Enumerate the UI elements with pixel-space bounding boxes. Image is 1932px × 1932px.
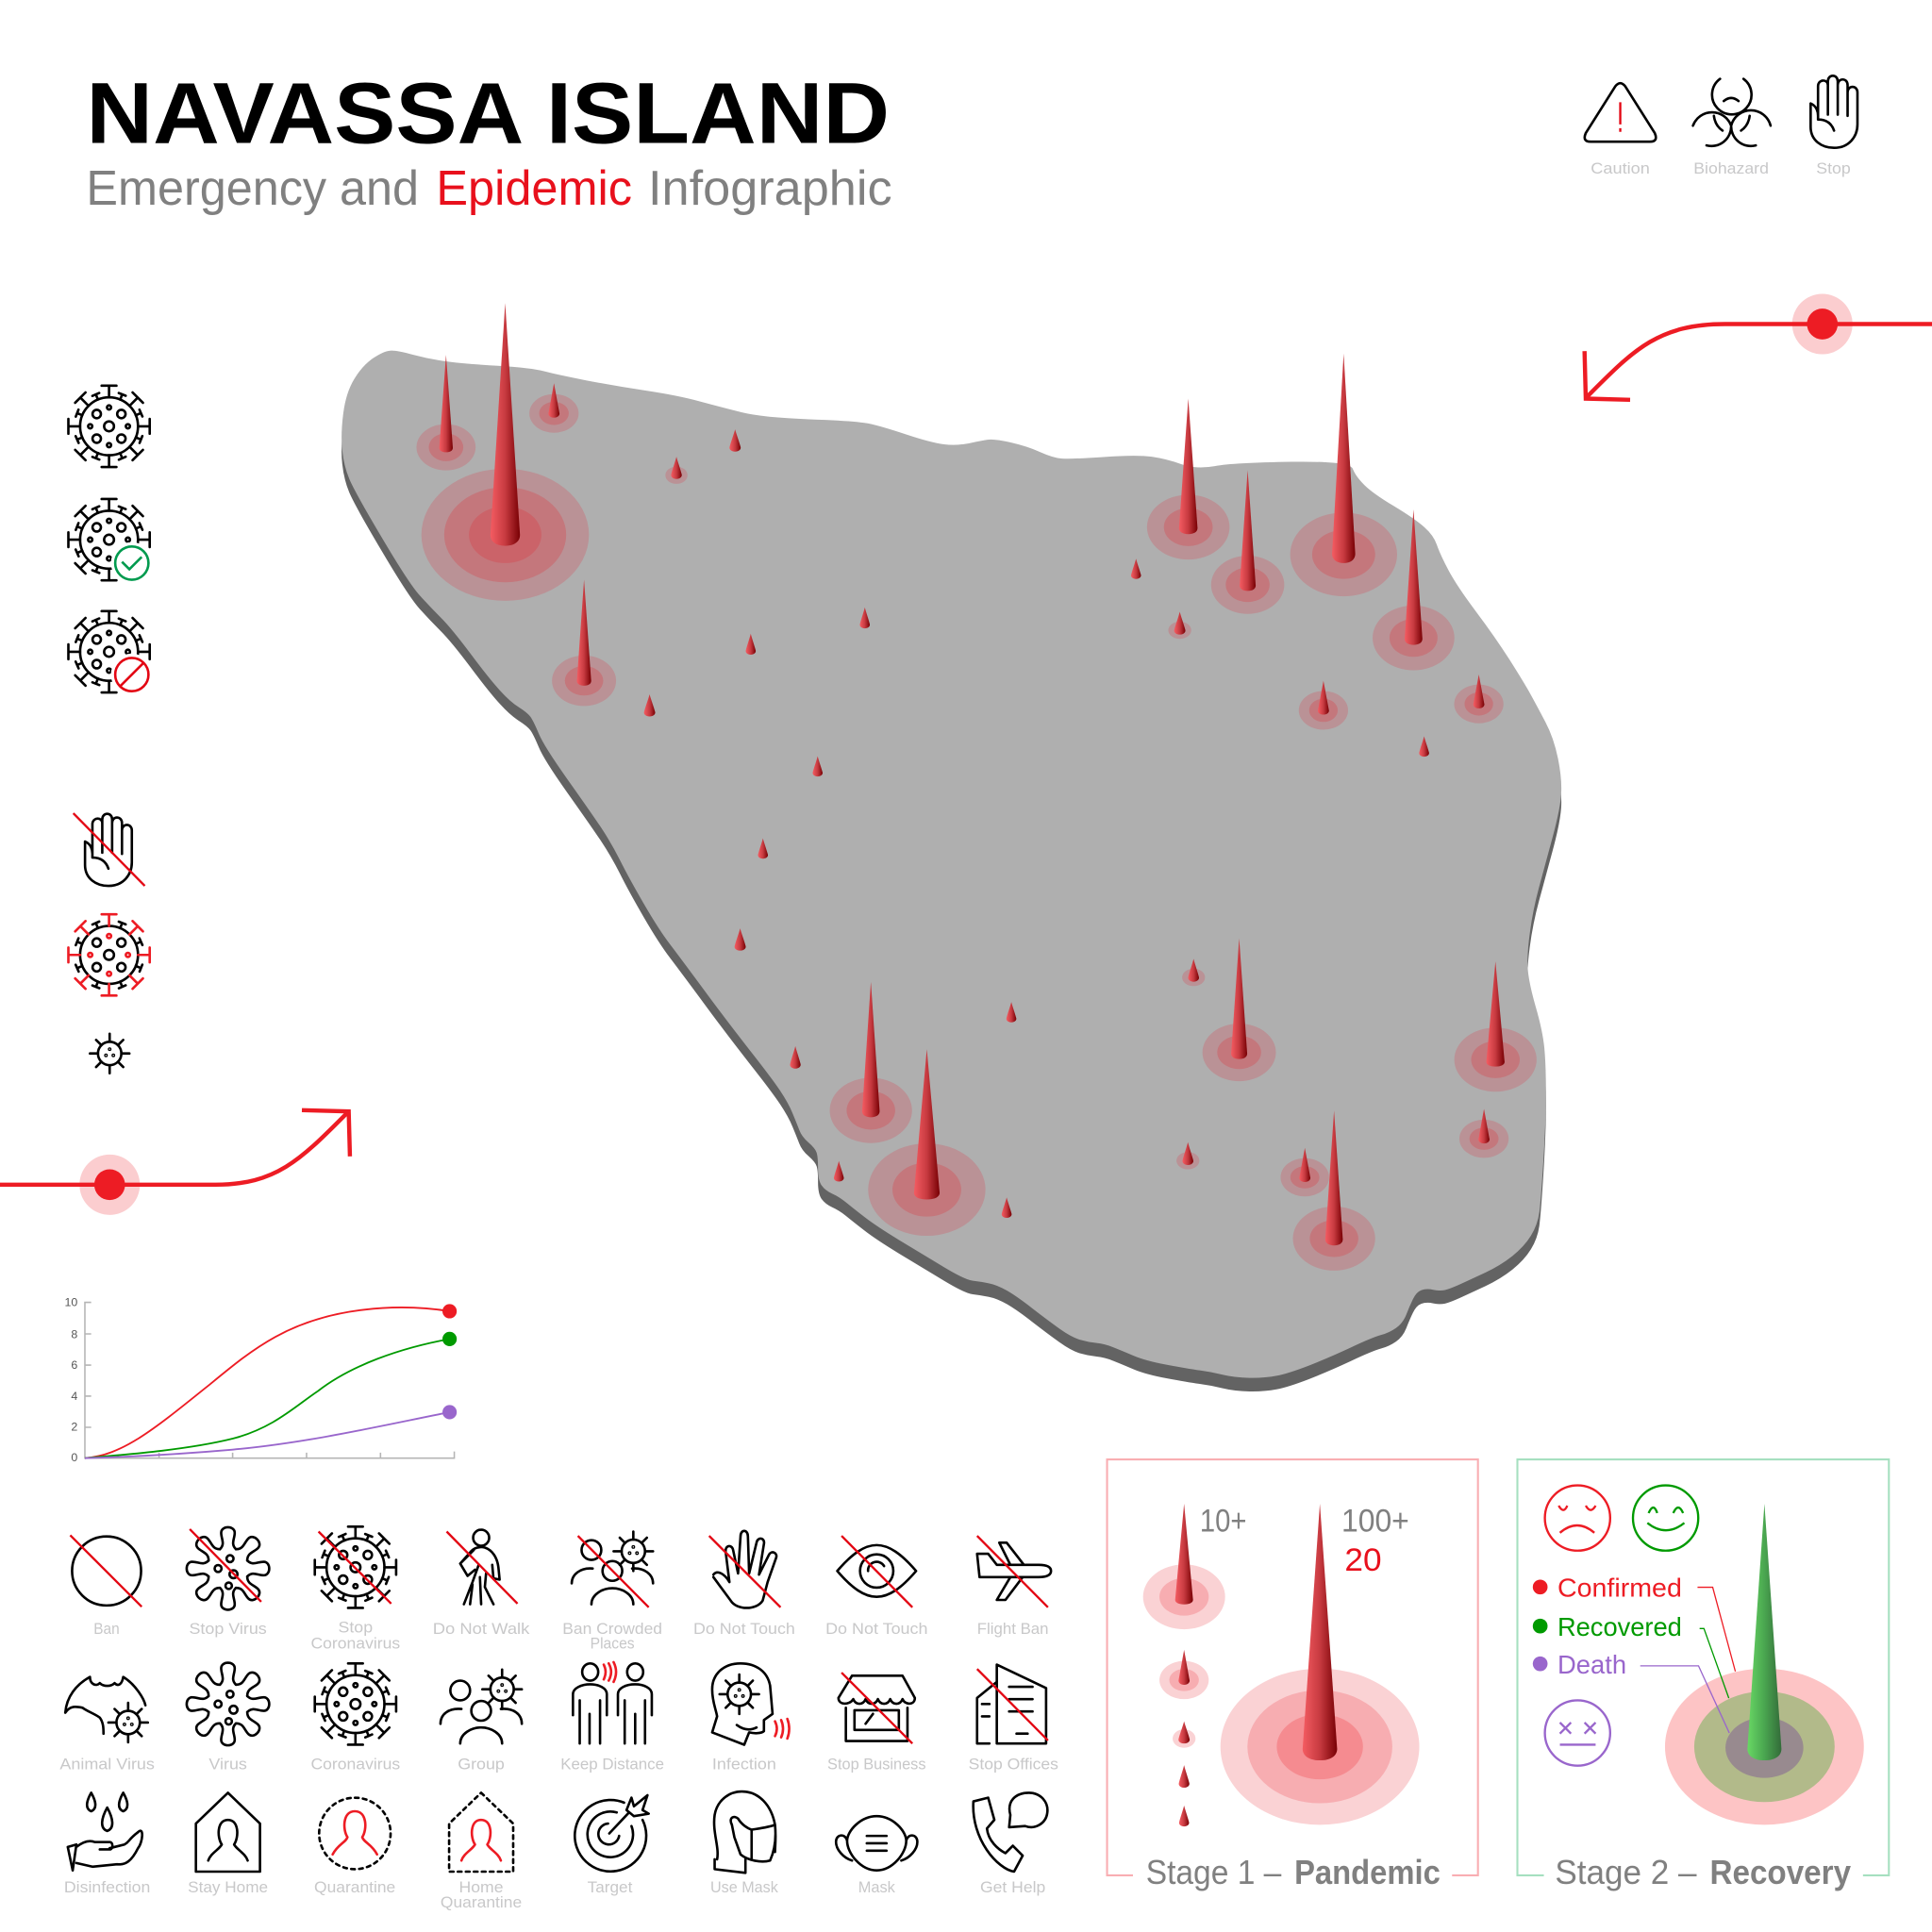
spot markers west: [644, 429, 870, 951]
legend: recovered: Recovered: [1557, 1612, 1682, 1641]
icon: ban: [70, 1535, 142, 1638]
icon: home quarantine: Home: [459, 1878, 504, 1896]
hotspot: [1291, 354, 1397, 596]
hotspot: [416, 355, 475, 471]
arrow: right incoming: [1585, 294, 1932, 400]
hotspot large north-west: [422, 303, 589, 601]
hotspot: [1299, 681, 1348, 729]
icon: coronavirus grid: Coronavirus: [310, 1756, 400, 1774]
icon: disinfection: [64, 1792, 150, 1896]
stage 1 heading: Stage 1 –: [1146, 1853, 1282, 1891]
stage 1 heading: Pandemic: [1294, 1853, 1441, 1891]
icon: small virus: [90, 1034, 129, 1074]
title: NAVASSA ISLAND: [86, 66, 890, 162]
legend numbers: [1200, 1504, 1409, 1578]
legend spike small: [1159, 1650, 1208, 1699]
subtitle: [86, 161, 892, 216]
subtitle: Emergency and: [86, 161, 419, 216]
icon: use mask: Use Mask: [710, 1878, 778, 1896]
face: happy green: [1633, 1486, 1698, 1551]
legend spike 10+: [1143, 1504, 1225, 1629]
legend spike smallest: [1179, 1765, 1190, 1826]
hotspot: [1293, 1110, 1375, 1271]
icon: stop business: Stop Business: [827, 1756, 926, 1774]
hotspot: [1373, 509, 1455, 671]
icon: animal virus: [59, 1677, 155, 1774]
panel: stage 1 pandemic: [1108, 1459, 1478, 1891]
icon: caution: Caution: [1591, 159, 1650, 177]
icon: do not touch hand: Do Not Touch: [693, 1620, 795, 1638]
icon: group: Group: [458, 1756, 505, 1774]
icon: keep distance: Keep Distance: [560, 1756, 664, 1774]
icon: flight ban: Flight Ban: [977, 1620, 1049, 1638]
icon: stop business: [827, 1673, 926, 1774]
icon: no hand: [74, 813, 144, 886]
subtitle: Epidemic: [436, 161, 632, 216]
icon: quarantine: [314, 1798, 395, 1896]
icon: coronavirus safe: [68, 499, 153, 584]
recovery rings: [1665, 1669, 1864, 1824]
line chart: 6: [71, 1358, 77, 1372]
icon: caution: [1585, 83, 1656, 177]
legend spike 100+: [1221, 1504, 1420, 1824]
line chart: 8: [71, 1327, 77, 1341]
icon: home quarantine: [441, 1792, 522, 1911]
icon: do not walk: [433, 1530, 530, 1638]
icon: ban crowded places: Places: [591, 1635, 635, 1653]
stage 2 heading: Recovery: [1710, 1853, 1852, 1891]
icon: mask: [836, 1816, 917, 1896]
icon: mask: Mask: [858, 1878, 895, 1896]
icon: coronavirus grid: [310, 1663, 400, 1774]
icon: red virus: [68, 914, 150, 995]
icon: ban: Ban: [93, 1620, 120, 1638]
hotspot: [1455, 961, 1537, 1091]
icon: stop virus: Stop Virus: [189, 1620, 267, 1638]
icon: stop coronavirus: [310, 1526, 400, 1653]
line chart: 4: [71, 1390, 77, 1403]
legend numbers: 20: [1344, 1542, 1382, 1578]
icon: target: Target: [588, 1878, 633, 1896]
icon: stop coronavirus: Coronavirus: [310, 1635, 400, 1653]
icon: do not touch eye: Do Not Touch: [825, 1620, 928, 1638]
legend: death: Death: [1557, 1650, 1626, 1679]
face: dead purple: [1545, 1700, 1610, 1766]
icon: stop offices: [969, 1665, 1058, 1774]
hotspot: [830, 982, 912, 1143]
icon: keep distance: [560, 1662, 664, 1774]
icon: stop coronavirus: Stop: [339, 1619, 373, 1637]
legend: confirmed: Confirmed: [1557, 1574, 1682, 1603]
icon: stay home: Stay Home: [188, 1878, 268, 1896]
legend numbers: 10+: [1200, 1504, 1247, 1540]
icon: stay home: [188, 1792, 268, 1896]
hotspot: [1203, 939, 1275, 1081]
icon: ban crowded places: [562, 1532, 662, 1653]
subtitle: Infographic: [648, 161, 892, 216]
icon: infection: [712, 1663, 790, 1774]
stage 2 heading: Stage 2 –: [1555, 1853, 1697, 1891]
hotspot small: [1176, 1142, 1199, 1170]
icon: target: [575, 1795, 649, 1896]
icon: get help: Get Help: [980, 1878, 1045, 1896]
hotspot: [1211, 470, 1284, 614]
spot markers north-east: [1131, 558, 1429, 757]
hotspot: [529, 383, 578, 433]
icon: home quarantine: Quarantine: [441, 1893, 522, 1911]
green spike: [1747, 1504, 1781, 1760]
icon: stop hand: Stop: [1816, 159, 1851, 177]
icon: biohazard: Biohazard: [1693, 159, 1769, 177]
panel: stage 2 recovery: [1517, 1459, 1889, 1891]
arrow: left outgoing: [0, 1110, 350, 1215]
legend numbers: 100+: [1341, 1504, 1409, 1540]
icon: get help: [974, 1792, 1047, 1896]
spot markers south-west: [790, 1002, 1016, 1218]
icon: disinfection: Disinfection: [64, 1878, 150, 1896]
hotspot small: [1168, 611, 1191, 639]
icon: flight ban: [977, 1536, 1051, 1638]
stage 1 heading: [1146, 1853, 1441, 1891]
icon: coronavirus banned: [68, 611, 153, 695]
icon: use mask: [710, 1791, 778, 1896]
icon: do not walk: Do Not Walk: [433, 1620, 530, 1638]
line chart: 2: [71, 1420, 77, 1433]
face: sad red: [1545, 1486, 1610, 1551]
hotspot: [1147, 399, 1229, 559]
hotspot: [1459, 1109, 1508, 1158]
icon: quarantine: Quarantine: [314, 1878, 395, 1896]
icon: do not touch eye: [825, 1536, 928, 1638]
line chart: 10: [64, 1295, 77, 1308]
icon: virus: [187, 1663, 269, 1774]
icon: do not touch hand: [693, 1531, 795, 1638]
hotspot: [1280, 1148, 1329, 1196]
hotspot: [1454, 675, 1504, 724]
leader lines: [1641, 1588, 1736, 1733]
icon: coronavirus: [68, 386, 150, 467]
icon: stop hand: [1810, 75, 1857, 177]
line chart: [64, 1295, 457, 1464]
icon: biohazard: [1693, 79, 1771, 177]
line chart: 0: [71, 1451, 77, 1464]
icon: infection: Infection: [712, 1756, 776, 1774]
hotspot: [868, 1049, 986, 1236]
hotspot small: [1182, 958, 1205, 986]
hotspot: [552, 580, 616, 706]
icon: group: [441, 1670, 522, 1774]
icon: stop virus: [187, 1527, 269, 1638]
icon: virus: Virus: [208, 1756, 247, 1774]
icon: stop offices: Stop Offices: [969, 1756, 1058, 1774]
icon: animal virus: Animal Virus: [59, 1756, 155, 1774]
map: island: [341, 351, 1561, 1391]
hotspot small: [665, 457, 688, 484]
stage 2 heading: [1555, 1853, 1852, 1891]
legend spike smaller: [1173, 1722, 1195, 1748]
icon: ban crowded places: Ban Crowded: [562, 1620, 662, 1638]
